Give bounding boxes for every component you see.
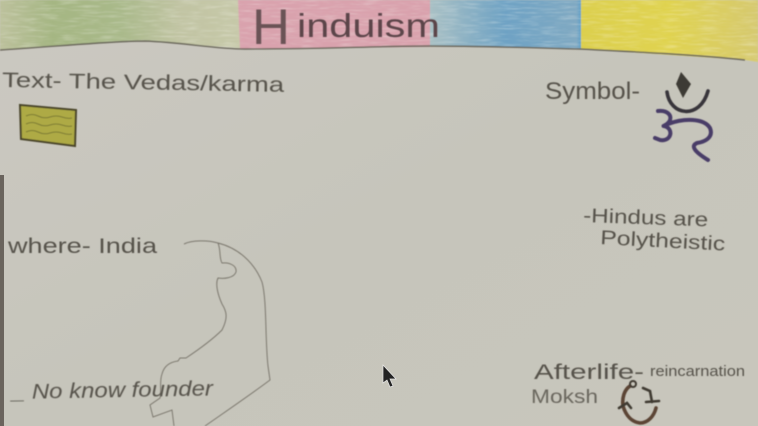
om dot (676, 72, 691, 98)
title (252, 0, 440, 55)
header section: yellow (581, 0, 758, 62)
where label: where- India (7, 235, 157, 258)
icon: mouse cursor (383, 365, 396, 387)
text label: Text- The Vedas/karma (2, 69, 285, 97)
afterlife line 2: Moksh (531, 387, 598, 408)
header section: green (0, 0, 240, 50)
header section: pink title panel (238, 0, 430, 49)
om body (655, 111, 711, 160)
icon: Vedas book (20, 105, 76, 146)
left page edge (0, 175, 4, 426)
title capital: H (252, 0, 290, 55)
polytheistic note (583, 205, 726, 256)
afterlife line 1: Afterlife- (534, 361, 644, 384)
symbol label: Symbol- (545, 78, 640, 105)
om crescent (667, 91, 708, 111)
header section: blue (430, 0, 581, 49)
icon: reincarnation cycle arrows (619, 381, 659, 423)
afterlife line 1 small: reincarnation (650, 363, 745, 380)
map: India outline (150, 241, 270, 426)
crayon texture (0, 0, 758, 62)
note line 1: -Hindus are (583, 205, 709, 231)
coloured header band (0, 0, 758, 62)
note line 2: Polytheistic (600, 227, 726, 256)
afterlife label (531, 361, 745, 408)
header divider line (0, 41, 745, 60)
title remainder: induism (297, 7, 440, 44)
founder note: _ No know founder (9, 377, 214, 404)
icon: Om symbol (655, 72, 711, 160)
